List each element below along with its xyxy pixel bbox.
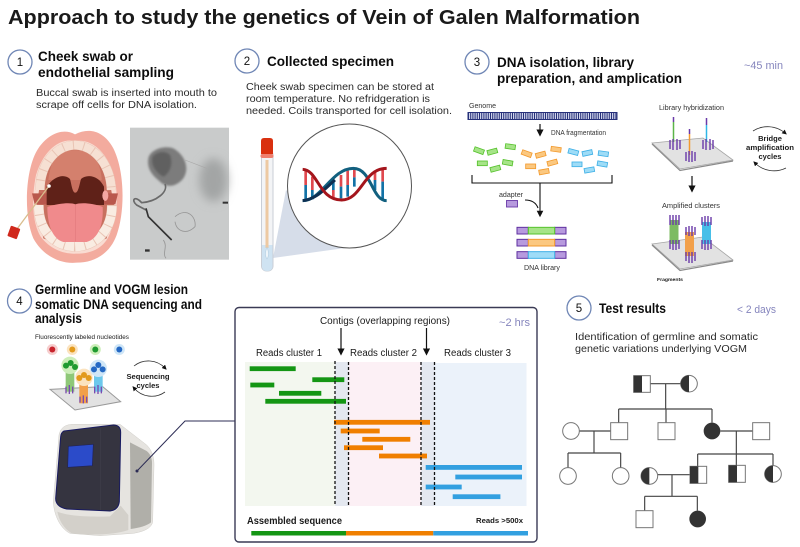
blue reads (426, 465, 522, 499)
duration: 2 hrs: ~2 hrs (499, 317, 530, 329)
cluster labels: Reads cluster 3 (444, 348, 511, 359)
heading: DNA isolation: DNA isolation, library (497, 54, 634, 70)
title: Approach to study the genetics of Vein of Galen Malformation (8, 7, 640, 29)
icon: sequencer machine (53, 424, 154, 536)
sequencing cycles (126, 361, 170, 396)
assembled sequence bar (251, 531, 528, 536)
label: reads coverage: Reads >500x (476, 516, 524, 525)
heading: germline sequencing (35, 281, 202, 326)
step number 3 (465, 50, 489, 74)
text: specimen storage description: room temperature. No refridgeration is (246, 94, 430, 105)
step number 3: 3 (474, 57, 480, 69)
bridge amplification cycles: cycles (759, 152, 781, 161)
heading: test results: Test results (599, 300, 666, 316)
duration: 45 min: ~45 min (744, 60, 783, 72)
text: results description (575, 332, 758, 355)
DNA fragments (474, 144, 609, 175)
icon: open mouth with swab (7, 131, 123, 263)
panel: step 5 test results (560, 296, 781, 528)
label: DNA library: DNA library (524, 265, 560, 272)
panel: step 4 sequencing (8, 281, 235, 536)
cluster backgrounds (245, 362, 526, 506)
magnifier cone (273, 190, 345, 258)
callout line from machine to assembly panel (136, 421, 235, 472)
arrow: DNA fragmentation: DNA fragmentation (551, 130, 606, 137)
pedigree chart (560, 375, 781, 528)
text: specimen storage description: Cheek swab specimen can be stored at (246, 82, 434, 93)
text: buccal swab description: Buccal swab is inserted into mouth to (36, 88, 217, 99)
text: results description: genetic variations underlying VOGM (575, 344, 747, 355)
heading: DNA isolation: preparation, and amplication (497, 70, 682, 86)
heading: germline sequencing: Germline and VOGM lesion (35, 281, 188, 297)
text: buccal swab description (36, 88, 217, 111)
adapter: adapter (499, 192, 524, 199)
icon: swab tube (260, 138, 274, 271)
text: buccal swab description: scrape off cells for DNA isolation. (36, 100, 197, 111)
cluster labels: Reads cluster 2 (350, 348, 417, 359)
DNA library (517, 227, 566, 258)
heading: collected specimen: Collected specimen (267, 53, 394, 69)
step number 2: 2 (244, 56, 250, 68)
duration: 2 days: < 2 days (737, 304, 776, 316)
panel: step 3 DNA isolation and library prep (465, 50, 794, 283)
label: fluorescently labeled nucleotides: Fluorescently labeled nucleotides (35, 335, 129, 341)
sequencing flow cell (50, 357, 121, 410)
text: specimen storage description (246, 82, 452, 117)
label: assembled sequence: Assembled sequence (247, 516, 342, 527)
text: results description: Identification of germline and somatic (575, 332, 758, 343)
panel: read assembly chart (235, 308, 537, 542)
bridge amplification cycles (746, 127, 794, 171)
step number 4: 4 (16, 296, 23, 308)
heading: cheek swab: endothelial sampling (38, 64, 174, 80)
genome strand (468, 103, 617, 120)
step number 5 (567, 296, 591, 320)
step number 5: 5 (576, 303, 582, 315)
sequencing cycles: Sequencing (126, 372, 170, 381)
arrow: hybridization to clusters (691, 176, 693, 189)
text: specimen storage description: needed. Coils transported for cell isolation. (246, 106, 452, 117)
amplified clusters: Amplified clusters (662, 203, 721, 210)
label: contigs: Contigs (overlapping regions) (320, 316, 450, 327)
sequencing cycles: cycles (137, 381, 159, 390)
heading: germline sequencing: somatic DNA sequencing and (35, 296, 202, 312)
heading: cheek swab (38, 48, 174, 80)
bridge amplification cycles: Bridge (758, 134, 782, 143)
genome strand: Genome (469, 103, 496, 110)
green reads (250, 366, 346, 404)
orange reads (334, 420, 430, 458)
cluster labels: Reads cluster 1 (256, 348, 322, 359)
panel: step 2 collected specimen (235, 49, 452, 271)
image: angiogram x-ray (130, 128, 229, 260)
step number 4 (8, 289, 32, 313)
heading: germline sequencing: analysis (35, 310, 82, 326)
bridge amplification cycles: amplification (746, 143, 794, 152)
library hybridization: Library hybridization (659, 105, 724, 112)
step number 1 (8, 50, 32, 74)
step number 2 (235, 49, 259, 73)
contig arrows (341, 328, 426, 352)
contig boundaries (335, 361, 434, 506)
cluster labels (256, 348, 511, 359)
panel: step 1 cheek swab (7, 48, 229, 263)
label: fragments: Fragments (657, 277, 683, 283)
heading: DNA isolation (497, 54, 682, 86)
nucleotide legend (47, 344, 125, 355)
library hybridization (652, 105, 733, 170)
step number 1: 1 (17, 57, 23, 69)
adapter (499, 192, 524, 207)
bracket and arrow to library (472, 175, 612, 214)
heading: cheek swab: Cheek swab or (38, 48, 134, 64)
amplified clusters (652, 203, 733, 270)
icon: magnified DNA helix (288, 124, 412, 248)
arrow: DNA fragmentation (540, 124, 606, 137)
